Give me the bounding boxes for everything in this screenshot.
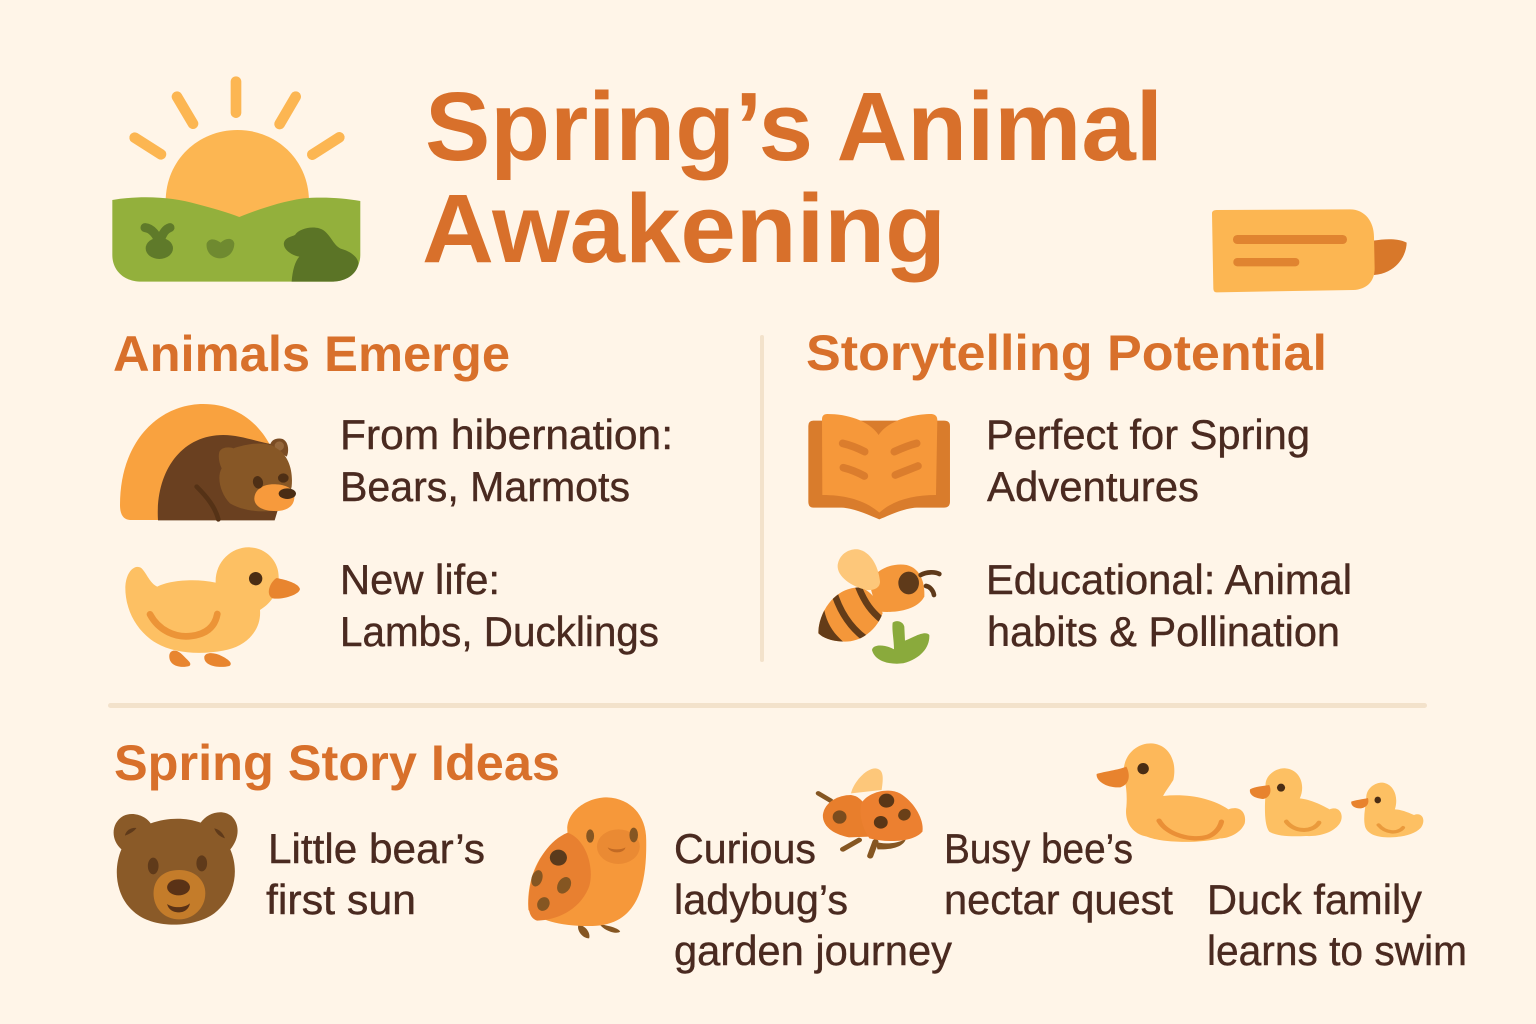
text: duck family: learns to swim xyxy=(1207,927,1467,974)
title: Spring’s Animal xyxy=(425,72,1163,181)
text: perfect for spring adventures: Adventures xyxy=(987,463,1199,510)
panel: animals emerge xyxy=(113,326,673,667)
text: little bear: Little bear’s xyxy=(268,825,485,872)
text: perfect for spring adventures: Perfect for Spring xyxy=(986,411,1310,458)
text: duck family: Duck family xyxy=(1207,876,1422,923)
text: from hibernation: From hibernation: xyxy=(340,411,673,458)
title xyxy=(422,72,1163,283)
heading: spring story ideas: Spring Story Ideas xyxy=(114,735,560,791)
text: new life xyxy=(340,556,659,655)
text: new life: Lambs, Ducklings xyxy=(340,608,659,655)
icon: speech tag xyxy=(1212,209,1407,292)
text: perfect for spring adventures xyxy=(986,411,1310,510)
text: from hibernation: Bears, Marmots xyxy=(340,463,630,510)
icon: sun over meadow xyxy=(112,82,360,282)
text: busy bee: Busy bee’s xyxy=(944,825,1133,872)
title: Awakening xyxy=(422,174,946,283)
icon: bear face xyxy=(114,812,238,925)
text: curious ladybug: ladybug’s xyxy=(674,876,848,923)
text: little bear: first sun xyxy=(266,876,416,923)
icon: bear in burrow xyxy=(120,404,296,520)
panel: storytelling potential xyxy=(806,325,1352,664)
heading: storytelling potential: Storytelling Potential xyxy=(806,325,1327,381)
text: busy bee: nectar quest xyxy=(944,876,1173,923)
text: educational xyxy=(986,556,1352,655)
text: educational: Educational: Animal xyxy=(986,556,1352,603)
text: curious ladybug xyxy=(674,825,952,974)
icon: duck family xyxy=(1097,743,1423,842)
icon: round bird with spots xyxy=(528,797,646,938)
text: busy bee xyxy=(944,825,1173,923)
icon: bee and sprout xyxy=(813,549,939,664)
text: little bear xyxy=(266,825,485,923)
panel: spring story ideas xyxy=(114,735,1467,974)
icon: open book xyxy=(808,414,950,519)
icon: ladybug xyxy=(818,768,923,856)
text: duck family xyxy=(1207,876,1467,974)
text: curious ladybug: garden journey xyxy=(674,927,952,974)
text: curious ladybug: Curious xyxy=(674,825,816,872)
icon: duckling xyxy=(125,547,300,667)
text: from hibernation xyxy=(340,411,673,510)
text: new life: New life: xyxy=(340,556,500,603)
text: educational: habits & Pollination xyxy=(987,608,1340,655)
heading: animals emerge: Animals Emerge xyxy=(113,326,510,382)
